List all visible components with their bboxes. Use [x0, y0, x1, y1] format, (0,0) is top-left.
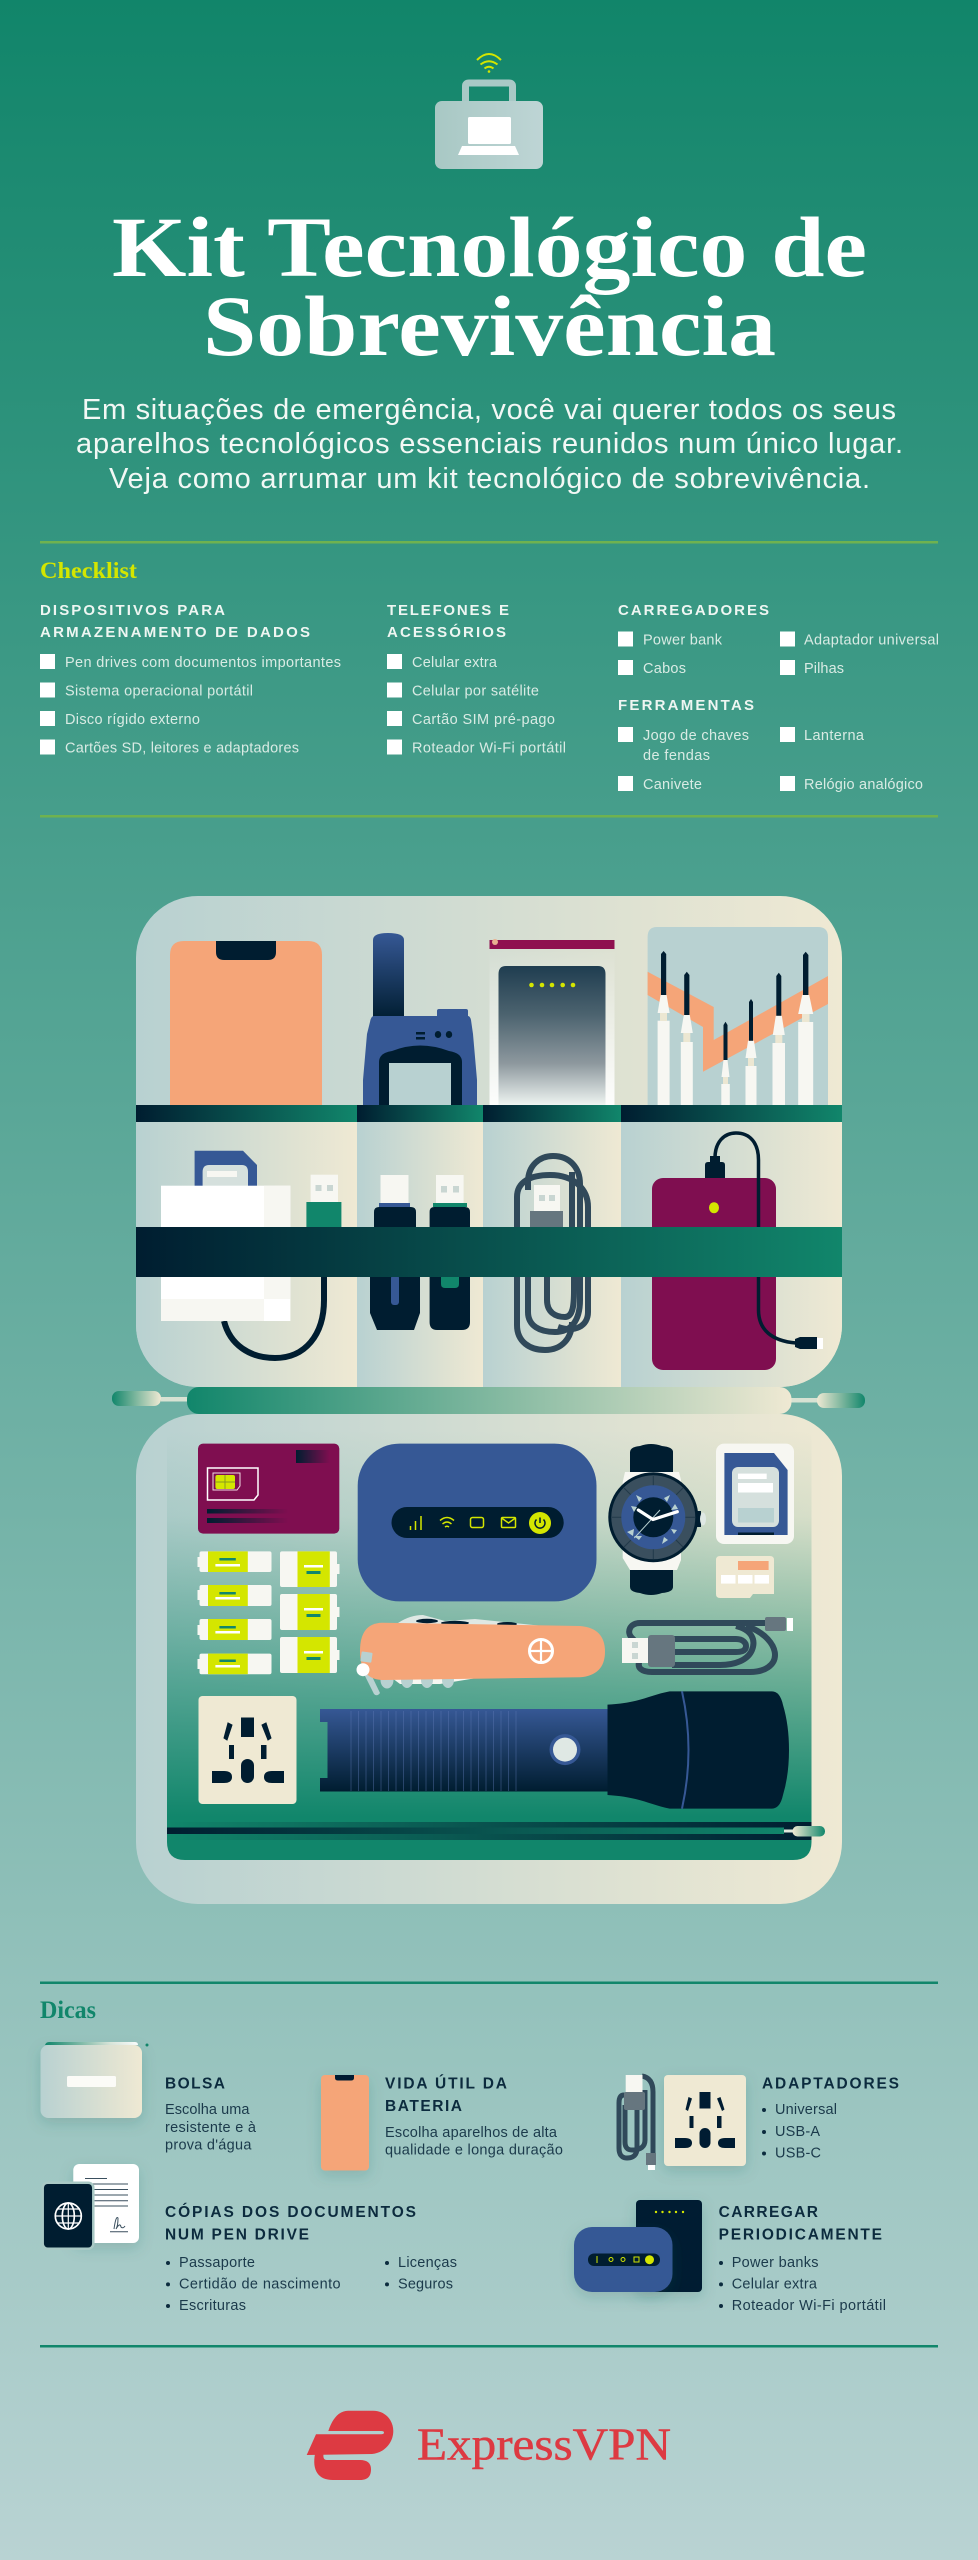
checklist column: chargers: Pilhas: [804, 661, 844, 677]
heading: checklist: Checklist: [40, 558, 137, 583]
text: battery tip: BATERIA: [385, 2098, 462, 2115]
icon: white power bank: [490, 939, 614, 1105]
logo wordmark: ExpressVPN: [417, 2418, 671, 2469]
logo: ExpressVPN: [307, 2411, 671, 2480]
text: battery tip: Escolha aparelhos de alta: [385, 2125, 558, 2141]
text: document copies: CÓPIAS DOS DOCUMENTOS: [165, 2203, 416, 2221]
tip: charge periodically: [574, 2200, 886, 2314]
text: bag tip: BOLSA: [165, 2076, 225, 2093]
checklist column: chargers: CARREGADORES: [618, 602, 769, 619]
checklist column: chargers: Cabos: [643, 661, 686, 677]
checklist column: phones and accessories: Celular extra: [412, 655, 498, 671]
text: charge tip: CARREGAR: [719, 2204, 818, 2221]
checklist column: data storage: Sistema operacional portátil: [65, 684, 253, 700]
intro paragraph: Em situações de emergência, você vai querer todos os seus: [82, 394, 896, 426]
icon: SIM card: [198, 1444, 339, 1534]
text: adapters tip: Universal: [775, 2102, 837, 2118]
icon: USB cable bundle: [622, 1617, 793, 1672]
zipper track: [167, 1822, 825, 1840]
icon: green USB drive: [306, 1175, 341, 1228]
checklist column: chargers: Adaptador universal: [804, 632, 939, 648]
checklist column: phones and accessories: ACESSÓRIOS: [387, 623, 506, 641]
title: [112, 199, 867, 374]
icon: documents and passport: [43, 2164, 139, 2249]
text: adapters tip: USB-C: [775, 2146, 821, 2162]
intro paragraph: aparelhos tecnológicos essenciais reunidos num único lugar.: [76, 428, 903, 460]
text: charge tip: PERIODICAMENTE: [719, 2226, 882, 2243]
text: battery tip: [385, 2075, 563, 2158]
icon: cable: [619, 2075, 656, 2170]
text: document copies: [165, 2203, 457, 2314]
panel: open kit, upper half: [136, 896, 842, 1387]
text: charge tip: Power banks: [732, 2255, 818, 2271]
title: Kit Tecnológico de: [112, 199, 867, 295]
checklist column: tools: de fendas: [643, 748, 710, 764]
text: document copies: Escrituras: [179, 2298, 246, 2314]
tip: battery life: [321, 2075, 563, 2170]
text: bag tip: prova d'água: [165, 2137, 252, 2153]
icon: screwdriver set: [648, 927, 828, 1105]
checklist column: tools: Canivete: [643, 777, 702, 793]
text: charge tip: Roteador Wi-Fi portátil: [732, 2298, 886, 2314]
text: document copies: Licenças: [398, 2255, 457, 2271]
checklist column: phones and accessories: Cartão SIM pré-pago: [412, 712, 555, 728]
icon: satellite phone: [363, 933, 477, 1105]
checklist column: phones and accessories: [387, 602, 566, 756]
text: document copies: Passaporte: [179, 2255, 255, 2271]
icon: batteries: [198, 1551, 340, 1674]
checklist column: tools: Lanterna: [804, 728, 865, 744]
large strap across the lower shelf: [136, 1227, 842, 1277]
icon: spare phone: [170, 941, 322, 1105]
icon: SD card: [716, 1444, 794, 1544]
text: bag tip: Escolha uma: [165, 2102, 250, 2118]
small strap across the upper shelf: [136, 1105, 842, 1122]
text: charge tip: [719, 2204, 886, 2314]
icon: microSD adapter: [716, 1556, 774, 1598]
checklist column: tools: Relógio analógico: [804, 777, 923, 793]
text: bag tip: [165, 2076, 257, 2153]
checklist column: data storage: [40, 602, 341, 756]
text: battery tip: VIDA ÚTIL DA: [385, 2075, 507, 2093]
icon: pouch: [40, 2042, 148, 2118]
checklist column: phones and accessories: TELEFONES E: [387, 602, 509, 619]
text: document copies: NUM PEN DRIVE: [165, 2226, 309, 2243]
intro paragraph: Veja como arrumar um kit tecnológico de sobrevivência.: [109, 463, 870, 495]
tip: adapters: [619, 2075, 899, 2170]
title: Sobrevivência: [203, 278, 776, 374]
checklist column: tools: [618, 697, 923, 793]
icon: flashlight: [320, 1691, 789, 1809]
icon: laptop bag with wifi: [435, 54, 543, 169]
checklist column: phones and accessories: Roteador Wi-Fi portátil: [412, 740, 566, 756]
text: adapters tip: USB-A: [775, 2124, 820, 2140]
checklist column: chargers: Power bank: [643, 632, 723, 648]
checklist column: tools: FERRAMENTAS: [618, 697, 754, 714]
text: battery tip: qualidade e longa duração: [385, 2142, 563, 2158]
checklist column: tools: Jogo de chaves: [643, 728, 749, 744]
checklist column: data storage: ARMAZENAMENTO DE DADOS: [40, 624, 310, 641]
icon: phone: [321, 2075, 369, 2170]
text: bag tip: resistente e à: [165, 2120, 257, 2136]
checklist column: data storage: DISPOSITIVOS PARA: [40, 602, 225, 619]
intro paragraph: [76, 394, 903, 495]
logo mark: [307, 2411, 393, 2480]
checklist column: phones and accessories: Celular por satélite: [412, 684, 539, 700]
checklist column: data storage: Cartões SD, leitores e adaptadores: [65, 740, 299, 756]
tip: document copies: [43, 2164, 457, 2314]
icon: SD card in white pouch with cable: [161, 1151, 324, 1358]
checklist column: chargers: [618, 602, 939, 677]
tip: bag: [40, 2042, 257, 2153]
icon: Wi-Fi router: [358, 1444, 596, 1601]
icon: analog watch: [608, 1444, 706, 1595]
text: adapters tip: ADAPTADORES: [762, 2076, 899, 2093]
text: charge tip: Celular extra: [732, 2276, 818, 2292]
icon: power bank and router: [574, 2200, 702, 2292]
zipper pull between halves: [112, 1387, 865, 1414]
icon: purple power bank with cable: [652, 1133, 823, 1370]
heading: tips: Dicas: [40, 1997, 96, 2024]
icon: two dark USB drives: [370, 1175, 470, 1330]
icon: pocket knife: [356, 1615, 605, 1695]
text: document copies: Seguros: [398, 2276, 453, 2292]
checklist column: data storage: Disco rígido externo: [65, 712, 200, 728]
icon: adapter plate: [664, 2075, 746, 2166]
text: document copies: Certidão de nascimento: [179, 2276, 341, 2292]
icon: coiled USB cable: [517, 1156, 588, 1350]
checklist column: data storage: Pen drives com documentos importantes: [65, 655, 341, 671]
text: adapters tip: [762, 2076, 899, 2162]
panel: open kit, lower half: [136, 1414, 842, 1904]
icon: universal power adapter: [198, 1696, 296, 1804]
